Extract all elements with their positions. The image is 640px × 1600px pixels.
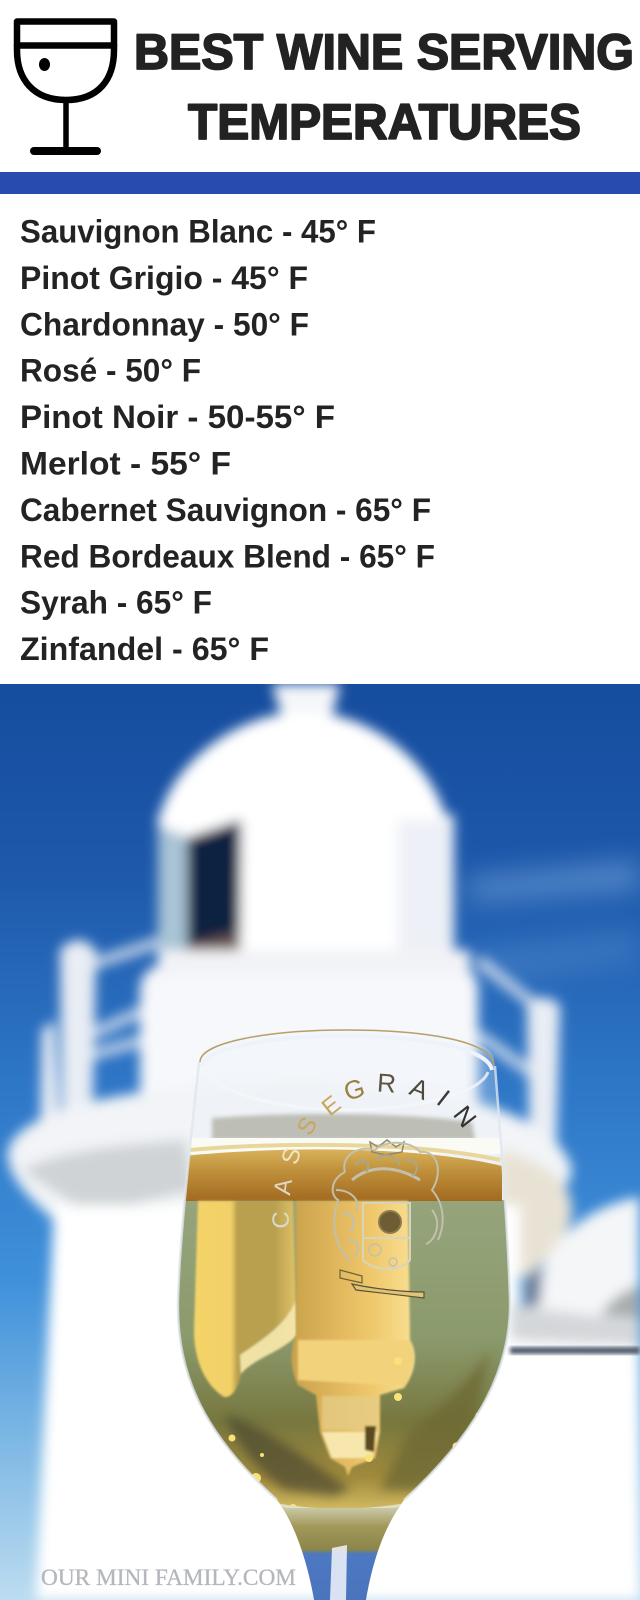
railing posts xyxy=(40,940,560,1160)
glass lettering: Cassegrain: R xyxy=(376,1067,397,1099)
glass lettering: Cassegrain: E xyxy=(317,1091,346,1122)
window xyxy=(187,820,241,950)
blurred lighthouse xyxy=(8,684,640,1600)
list: wine serving temperatures xyxy=(20,214,435,667)
list item: Zinfandel: Zinfandel - 65° F xyxy=(20,631,269,667)
finial xyxy=(272,684,340,725)
list item: Chardonnay: Chardonnay - 50° F xyxy=(20,306,309,342)
left reflection xyxy=(194,1201,297,1397)
dome xyxy=(160,712,447,825)
glass lettering: Cassegrain: A xyxy=(269,1177,298,1197)
lantern room xyxy=(158,815,454,965)
wine bottom rim xyxy=(280,1504,402,1508)
list item: Cabernet Sauvignon: Cabernet Sauvignon - 65° F xyxy=(20,492,431,528)
balcony underside xyxy=(22,1140,195,1215)
wine body xyxy=(176,1200,512,1508)
wine edge highlights xyxy=(228,1357,480,1512)
wine dark lower reflection xyxy=(225,1415,350,1496)
title xyxy=(134,24,634,150)
gallery xyxy=(130,958,488,1110)
building ledge shadow xyxy=(510,1347,640,1354)
glass lettering: Cassegrain: A xyxy=(406,1071,434,1106)
glass rim xyxy=(178,1030,510,1500)
stem xyxy=(280,1508,402,1600)
list item: Syrah: Syrah - 65° F xyxy=(20,585,212,621)
cloud streak xyxy=(465,862,640,985)
glass lettering: Cassegrain xyxy=(268,1067,483,1229)
watermark: OUR MINI FAMILY.COM xyxy=(41,1565,296,1590)
window panel xyxy=(158,825,190,950)
wine amber surface band xyxy=(184,1149,502,1201)
blue divider bar xyxy=(0,172,640,194)
balcony xyxy=(8,1080,572,1240)
wine glass xyxy=(176,1030,512,1600)
title: TEMPERATURES xyxy=(188,94,581,150)
glass crest xyxy=(333,1140,443,1298)
glass bowl tint xyxy=(474,1044,498,1114)
list item: Sauvignon Blanc: Sauvignon Blanc - 45° F xyxy=(20,214,376,250)
glass lettering: Cassegrain: G xyxy=(340,1072,368,1107)
list item: Pinot Grigio: Pinot Grigio - 45° F xyxy=(20,260,308,296)
tower reflection xyxy=(292,1201,415,1476)
glass lettering: Cassegrain: S xyxy=(292,1113,323,1140)
building lower right xyxy=(508,1340,640,1600)
glass lettering: Cassegrain: N xyxy=(447,1100,483,1133)
railing xyxy=(90,940,535,1075)
glass lettering: Cassegrain: S xyxy=(277,1145,307,1167)
list item: Red Bordeaux Blend: Red Bordeaux Blend - 65° F xyxy=(20,538,435,574)
sky xyxy=(0,684,640,1600)
photo: wine glass in front of lighthouse xyxy=(0,684,640,1600)
icon: wine glass xyxy=(17,22,114,151)
glass outline xyxy=(178,1062,510,1500)
glass lettering: Cassegrain: C xyxy=(268,1211,295,1229)
glass lettering: Cassegrain: I xyxy=(431,1084,456,1112)
list item: Merlot: Merlot - 55° F xyxy=(20,446,231,482)
reflection band above wine xyxy=(212,1114,475,1140)
list item: Pinot Noir: Pinot Noir - 50-55° F xyxy=(20,399,335,435)
list item: Rosé: Rosé - 50° F xyxy=(20,353,201,389)
tower xyxy=(36,1205,520,1600)
title: BEST WINE SERVING xyxy=(134,24,634,80)
